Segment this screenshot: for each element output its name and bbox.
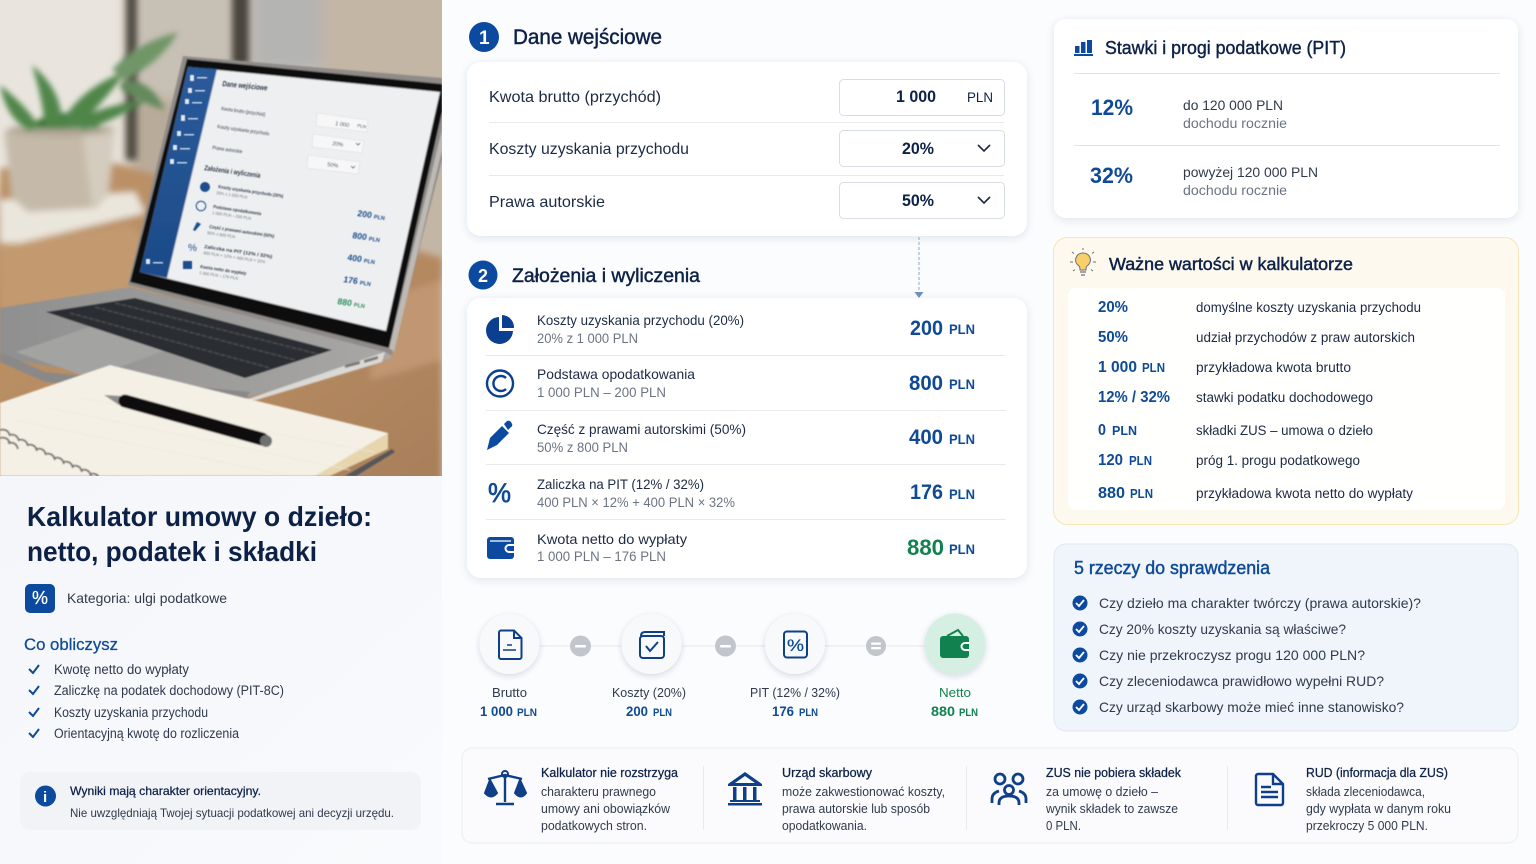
- value: 120 PLN: [1098, 452, 1360, 469]
- panel: tax rates: Stawki i progi podatkowe (PIT): [1105, 38, 1346, 58]
- laptop screen content: 880 PLN: [337, 296, 366, 310]
- laptop screen content: Założenia i wyliczenia: [204, 164, 261, 180]
- value: 20%: 20%: [1098, 299, 1128, 316]
- panel: five things to check: [1054, 544, 1518, 731]
- value: 12% / 32%: stawki podatku dochodowego: [1196, 390, 1373, 405]
- value: 120 PLN: próg 1. progu podatkowego: [1196, 453, 1360, 468]
- note: RUD: [1256, 766, 1451, 833]
- arrow: inputs to calculations: [914, 237, 924, 298]
- input row: deductible costs: [489, 130, 1004, 166]
- section 1 heading: Dane wejściowe: [513, 26, 662, 49]
- left panel background: [0, 476, 442, 864]
- operator: equals: [866, 636, 886, 656]
- heading: co obliczysz: Co obliczysz: [24, 635, 118, 654]
- callout: orientacyjny charakter: Nie uwzględniają Twojej sytuacji podatkowej ani decyzji urzędu.: [70, 806, 394, 820]
- input row: copyright share: 50%: [902, 191, 934, 210]
- note: kalkulator: charakteru prawnego: [541, 785, 656, 799]
- note: RUD: gdy wypłata w danym roku: [1306, 802, 1451, 816]
- icon: bar chart: [1074, 40, 1093, 56]
- callout: orientacyjny charakter: [20, 772, 421, 830]
- row: PIT advance: 176: [910, 481, 943, 504]
- note: urząd skarbowy: Urząd skarbowy: [782, 766, 873, 780]
- value: 0 PLN: [1098, 422, 1373, 439]
- laptop screen content: 800 PLN: [352, 230, 381, 244]
- laptop screen content: 1 000 PLN – 176 PLN: [199, 270, 239, 281]
- rate: 32%: [1090, 163, 1318, 198]
- laptop screen content: Część z prawami autorskimi (50%): [209, 224, 275, 239]
- row: copyright part: Część z prawami autorskimi (50%): [537, 421, 746, 437]
- row: copyright part: 400: [909, 426, 943, 449]
- value: 0 PLN: składki ZUS – umowa o dzieło: [1196, 423, 1373, 438]
- bottom info band: [462, 748, 1518, 843]
- value: 50%: 50%: [1098, 329, 1128, 346]
- note: ZUS: za umowę o dzieło –: [1046, 785, 1158, 799]
- note: RUD: składa zleceniodawca,: [1306, 785, 1425, 799]
- row: deductible costs: 200: [910, 317, 943, 340]
- value: 20%: [1098, 299, 1421, 316]
- value: 1 000 PLN: [1098, 359, 1351, 376]
- input row: gross amount: [489, 80, 1004, 116]
- laptop screen content: Koszty uzyskania przychodu (20%): [218, 184, 284, 199]
- laptop screen content: 176 PLN: [343, 274, 372, 288]
- icon: percent: %: [488, 478, 511, 508]
- laptop screen content: 50%: [327, 162, 339, 170]
- check item 2: Czy 20% koszty uzyskania są właściwe?: [1099, 621, 1346, 637]
- value: 12% / 32%: [1098, 389, 1373, 406]
- value: 0 PLN: 0: [1098, 422, 1106, 439]
- value: 1 000 PLN: 1 000: [1098, 359, 1137, 376]
- row: net amount: 880: [907, 535, 944, 560]
- laptop screen content: 400 PLN × 12% + 400 PLN × 32%: [203, 250, 266, 264]
- laptop screen content: [146, 75, 386, 310]
- note: ZUS: [992, 766, 1182, 833]
- laptop screen content: 400 PLN: [347, 252, 376, 266]
- rate: 32%: 32%: [1090, 163, 1133, 188]
- input row: gross amount: 1 000: [896, 87, 936, 106]
- note: urząd skarbowy: [728, 766, 945, 833]
- note: urząd skarbowy: opodatkowania.: [782, 819, 867, 833]
- note: ZUS: ZUS nie pobiera składek: [1046, 766, 1182, 780]
- value: 20%: domyślne koszty uzyskania przychodu: [1196, 300, 1421, 315]
- laptop screen content: PLN: [357, 123, 367, 129]
- checklist: what you calculate: Orientacyjną kwotę do rozliczenia: [54, 726, 239, 741]
- step: PIT: PLN: [799, 707, 818, 719]
- operator: minus: [570, 636, 591, 656]
- operator: minus: [715, 636, 736, 656]
- section 1 heading: 1: [479, 28, 490, 49]
- icon: wallet: [487, 537, 514, 559]
- row: PIT advance: [488, 476, 975, 510]
- section 2 heading: [468, 260, 700, 290]
- note: ZUS: 0 PLN.: [1046, 819, 1081, 833]
- step: brutto: [480, 614, 540, 719]
- checklist: what you calculate: Kwotę netto do wypłaty: [54, 662, 189, 677]
- input row: deductible costs: 20%: [902, 139, 934, 158]
- check item 3: Czy nie przekroczysz progu 120 000 PLN?: [1099, 647, 1365, 663]
- laptop screen content: 50% z 800 PLN: [207, 230, 236, 239]
- value: 880 PLN: [1098, 485, 1413, 502]
- checklist: what you calculate: [29, 662, 284, 741]
- value: 1 000 PLN: przykładowa kwota brutto: [1196, 360, 1351, 375]
- rate: 32%: dochodu rocznie: [1183, 182, 1287, 198]
- input row: gross amount: Kwota brutto (przychód): [489, 89, 661, 106]
- step: PIT: PIT (12% / 32%): [750, 685, 840, 700]
- note: RUD: RUD (informacja dla ZUS): [1306, 766, 1448, 780]
- rate: 32%: powyżej 120 000 PLN: [1183, 164, 1318, 180]
- laptop screen content: Prawa autorskie: [212, 145, 243, 155]
- step: brutto: Brutto: [492, 685, 527, 700]
- laptop screen content: Dane wejściowe: [222, 79, 268, 92]
- value: 880 PLN: 880: [1098, 485, 1125, 502]
- title: netto, podatek i składki: [27, 536, 317, 567]
- category badge: [25, 584, 227, 613]
- step: PIT: 176: [772, 704, 794, 719]
- note: kalkulator: [485, 766, 678, 833]
- laptop screen content: Koszty uzyskania przychodu: [217, 124, 270, 137]
- row: tax base: [487, 366, 975, 400]
- value: 1 000 PLN: PLN: [1142, 361, 1165, 375]
- row: copyright part: 50% z 800 PLN: [537, 440, 628, 455]
- step: netto: [924, 614, 986, 719]
- row: PIT advance: PLN: [949, 486, 975, 502]
- callout: orientacyjny charakter: Wyniki mają charakter orientacyjny.: [70, 784, 261, 798]
- value: 880 PLN: PLN: [1130, 487, 1153, 501]
- section 2 heading: Założenia i wyliczenia: [512, 266, 700, 287]
- row: net amount: PLN: [949, 541, 975, 557]
- note: urząd skarbowy: prawa autorskie lub sposób: [782, 802, 930, 816]
- laptop screen content: Podstawa opodatkowania: [213, 204, 262, 216]
- panel: input data: [467, 62, 1027, 236]
- checklist: what you calculate: Zaliczkę na podatek dochodowy (PIT-8C): [54, 683, 284, 698]
- section 2 heading: 2: [478, 266, 488, 286]
- laptop screen content: Zaliczka na PIT (12% / 32%): [204, 244, 273, 259]
- panel: tax rates: [1054, 19, 1518, 218]
- row: deductible costs: 20% z 1 000 PLN: [537, 331, 638, 346]
- row: deductible costs: PLN: [949, 321, 975, 337]
- row: copyright part: PLN: [949, 431, 975, 447]
- input row: deductible costs: Koszty uzyskania przychodu: [489, 141, 689, 158]
- step: koszty: PLN: [653, 707, 672, 719]
- laptop screen content: 1 000: [335, 121, 350, 129]
- callout: orientacyjny charakter: i: [43, 789, 47, 806]
- title: Kalkulator umowy o dzieło:: [27, 501, 372, 532]
- row: tax base: PLN: [949, 376, 975, 392]
- step: netto: 880: [931, 704, 955, 719]
- laptop screen content: 20%: [332, 141, 344, 149]
- value: 50%: [1098, 329, 1415, 346]
- value: 50%: udział przychodów z praw autorskich: [1196, 330, 1415, 345]
- note: kalkulator: Kalkulator nie rozstrzyga: [541, 766, 678, 780]
- row: tax base: 800: [909, 372, 943, 395]
- panel: calculations: [467, 298, 1027, 578]
- flow: gross minus costs minus PIT equals net: [480, 614, 986, 719]
- row: tax base: Podstawa opodatkowania: [537, 366, 695, 382]
- laptop screen content: 200 PLN: [357, 208, 386, 222]
- step: PIT: %: [787, 636, 804, 655]
- step: koszty: Koszty (20%): [612, 685, 686, 700]
- note: kalkulator: umowy ani obowiązków: [541, 802, 671, 816]
- value: 12% / 32%: 12% / 32%: [1098, 389, 1170, 406]
- panel: key values: [1054, 238, 1518, 524]
- step: netto: Netto: [939, 685, 971, 700]
- panel: key values: Ważne wartości w kalkulatorze: [1109, 254, 1353, 274]
- laptop screen content: 20% z 1 000 PLN: [216, 190, 248, 200]
- row: PIT advance: Zaliczka na PIT (12% / 32%): [537, 476, 704, 492]
- panel: five things to check: 5 rzeczy do sprawdzenia: [1074, 558, 1271, 578]
- category badge: %: [32, 588, 48, 608]
- category badge: Kategoria: ulgi podatkowe: [67, 590, 227, 606]
- icon: document: [1256, 774, 1283, 805]
- rate: 12%: [1091, 95, 1287, 131]
- row: PIT advance: 400 PLN × 12% + 400 PLN × 32%: [537, 495, 735, 510]
- icon: light bulb: [1070, 248, 1096, 275]
- step: brutto: PLN: [517, 707, 537, 719]
- checklist: what you calculate: Koszty uzyskania przychodu: [54, 705, 208, 720]
- step: koszty: 200: [626, 704, 648, 719]
- note: urząd skarbowy: może zakwestionować koszty,: [782, 785, 945, 799]
- icon: bank: [728, 772, 762, 806]
- value: 880 PLN: przykładowa kwota netto do wypłaty: [1196, 486, 1413, 501]
- laptop screen content: Kwota brutto (przychód): [221, 106, 266, 118]
- value: 120 PLN: 120: [1098, 452, 1123, 469]
- row: deductible costs: [486, 312, 975, 346]
- note: ZUS: wynik składek to zawsze: [1045, 802, 1178, 816]
- step: koszty: [612, 614, 686, 719]
- photo: laptop on a desk with notebook and pen: [0, 0, 462, 500]
- note: RUD: przekroczy 5 000 PLN.: [1306, 819, 1428, 833]
- icon: people: [992, 774, 1026, 805]
- row: deductible costs: Koszty uzyskania przychodu (20%): [537, 312, 744, 328]
- check item 4: Czy zleceniodawca prawidłowo wypełni RUD?: [1099, 673, 1384, 689]
- input row: gross amount: PLN: [967, 89, 993, 105]
- section 1 heading: [469, 22, 662, 52]
- note: kalkulator: podatkowych stron.: [541, 819, 647, 833]
- laptop screen content: 1 000 PLN – 200 PLN: [212, 210, 252, 221]
- rate: 12%: 12%: [1091, 95, 1133, 120]
- step: brutto: 1 000: [480, 704, 513, 719]
- icon: scales: [485, 771, 526, 804]
- laptop screen content: Kwota netto do wypłaty: [200, 264, 247, 276]
- value: 0 PLN: PLN: [1112, 424, 1137, 438]
- row: net amount: 1 000 PLN – 176 PLN: [537, 549, 666, 564]
- value: 120 PLN: PLN: [1129, 454, 1152, 468]
- row: copyright part: [487, 421, 975, 455]
- input row: copyright share: Prawa autorskie: [489, 194, 605, 211]
- laptop screen content: %: [188, 243, 197, 254]
- check item 5: Czy urząd skarbowy może mieć inne stanowisko?: [1099, 699, 1404, 715]
- title: [27, 501, 372, 567]
- row: net amount: Kwota netto do wypłaty: [537, 531, 687, 547]
- step: PIT: [750, 614, 840, 719]
- rate: 12%: dochodu rocznie: [1183, 115, 1287, 131]
- rate: 12%: do 120 000 PLN: [1183, 97, 1283, 113]
- icon: copyright: [487, 370, 513, 396]
- icon: pen: [487, 421, 512, 450]
- step: netto: PLN: [959, 707, 978, 719]
- icon: pie chart: [486, 315, 514, 344]
- row: tax base: 1 000 PLN – 200 PLN: [537, 385, 666, 400]
- input row: copyright share: [489, 182, 1004, 218]
- check item 1: Czy dzieło ma charakter twórczy (prawa autorskie)?: [1099, 595, 1421, 611]
- row: net amount: [487, 531, 975, 564]
